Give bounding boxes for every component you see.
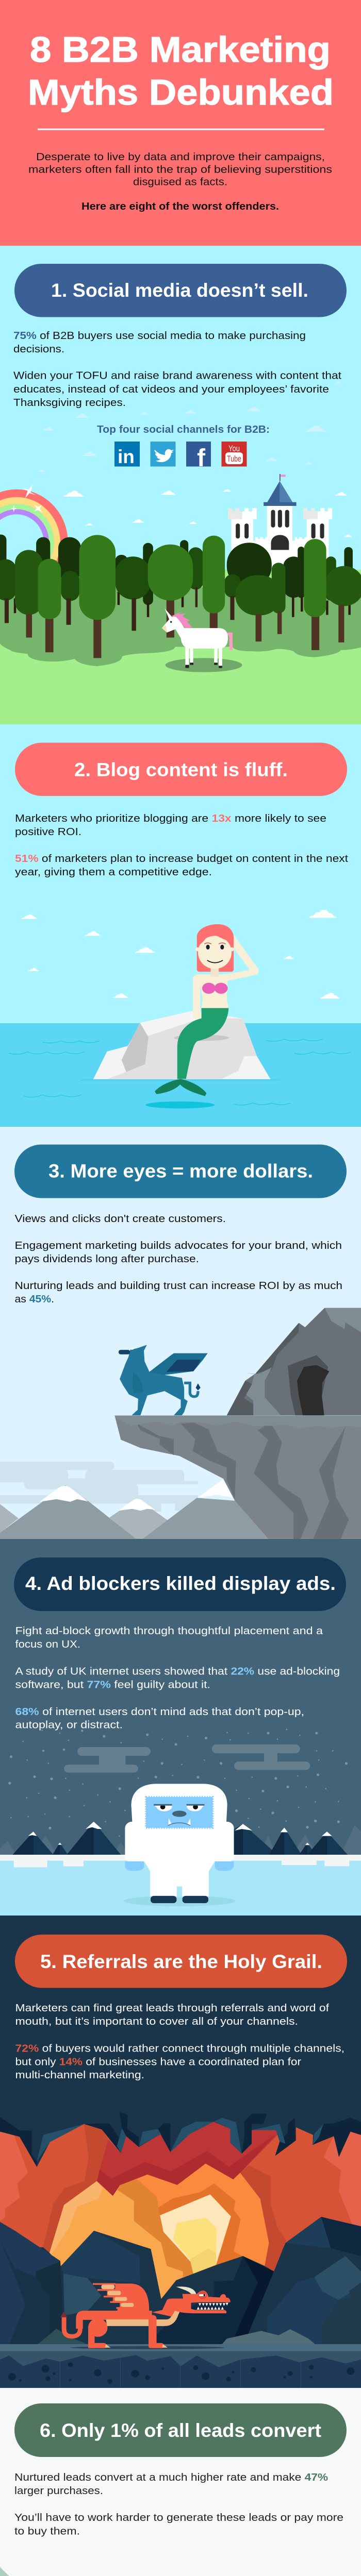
text block 3: Views and clicks don't create customers.: [14, 1213, 226, 1225]
heading pill 4: 4. Ad blockers killed display ads.: [25, 1573, 336, 1594]
ice shelf: [0, 1855, 361, 1867]
text block 4: software, but 77% feel guilty about it.: [15, 1680, 210, 1691]
cave lava walls: [0, 2122, 361, 2299]
icon: Twitter: [151, 442, 175, 467]
text block 2: positive ROI.: [15, 826, 81, 838]
intro text: [28, 151, 332, 212]
heading pill 2: [15, 743, 347, 796]
text block 6: Nurtured leads convert at a much higher rate and make 47%: [14, 2472, 328, 2483]
waves: [9, 1039, 351, 1105]
cliff and cave: [114, 1308, 361, 1539]
scene: yeti: [0, 1729, 361, 1906]
panel: myth 5: [0, 1916, 361, 2388]
panel: myth 6: [0, 2388, 361, 2576]
yeti: [124, 1784, 236, 1906]
icon: YouTube: You: [228, 444, 240, 453]
text block 6: You’ll have to work harder to generate these leads or pay more: [14, 2512, 343, 2523]
mountains: [0, 1822, 361, 1855]
rock: [81, 1011, 280, 1080]
text block 3: Nurturing leads and building trust can increase ROI by as much: [14, 1280, 342, 1292]
green mountains: [0, 2567, 235, 2576]
unicorn: [162, 608, 242, 672]
icon: LinkedIn: [114, 442, 140, 467]
text block 2: 51% of marketers plan to increase budget on content in the next: [15, 853, 348, 865]
heading pill 3: 3. More eyes = more dollars.: [48, 1160, 313, 1182]
text block 1: 75% of B2B buyers use social media to make purchasing: [13, 330, 306, 342]
trees: back row: [0, 535, 353, 617]
icon: YouTube: Tube: [227, 454, 241, 464]
title: 8 B2B Marketing: [30, 29, 331, 70]
rainbow: [0, 484, 68, 595]
text block 3: Engagement marketing builds advocates for your brand, which: [14, 1240, 342, 1251]
heading pill 2: 2. Blog content is fluff.: [74, 759, 288, 780]
text block 3: pays dividends long after purchase.: [14, 1253, 199, 1265]
text block 4: Fight ad-block growth through thoughtful placement and a: [15, 1625, 323, 1637]
text block 4: focus on UX.: [15, 1639, 80, 1650]
heading pill 5: 5. Referrals are the Holy Grail.: [40, 1951, 322, 1972]
text block 5: 72% of buyers would rather connect through multiple channels,: [15, 2043, 344, 2055]
scene: unicorn forest: [0, 381, 361, 724]
panel: myth 4: [0, 1539, 361, 1916]
ground: [0, 570, 361, 724]
text block 4: A study of UK internet users showed that 22% use ad-blocking: [15, 1666, 340, 1677]
text block 6: [14, 2472, 343, 2537]
clouds: [0, 1462, 198, 1512]
stars: [8, 1729, 348, 1837]
text block 1: Thanksgiving recipes.: [13, 397, 126, 409]
dragon: [60, 2283, 231, 2349]
title: [28, 29, 334, 112]
title: Myths Debunked: [28, 72, 334, 112]
panel: myth 1: [0, 246, 361, 725]
text block 5: multi-channel marketing.: [15, 2070, 144, 2081]
text block 5: but only 14% of businesses have a coordinated plan for: [15, 2057, 301, 2068]
icon: Facebook: f: [197, 445, 206, 472]
channel icons: Top four social channels for B2B:: [97, 424, 270, 435]
text block 4: 68% of internet users don’t mind ads that don’t pop-up,: [15, 1706, 304, 1718]
panel: myth 3: [0, 1127, 361, 1539]
stalactites: [0, 2112, 361, 2167]
icon: YouTube: [222, 442, 247, 467]
text block 6: to buy them.: [14, 2526, 80, 2537]
scene: griffin on cliff: [0, 1308, 361, 1539]
text block 4: autoplay, or distract.: [15, 1720, 123, 1731]
channel icons: [97, 424, 270, 472]
trees: front row: [38, 535, 326, 658]
text block 1: educates, instead of cat videos and your employees’ favorite: [13, 384, 329, 395]
text block 1: decisions.: [13, 344, 64, 355]
text block 5: [15, 2003, 344, 2081]
intro text: disguised as facts.: [133, 176, 227, 188]
scene: loch ness monster: [0, 2567, 361, 2576]
text block 3: [14, 1213, 342, 1305]
text block 3: as 45%.: [14, 1294, 54, 1305]
text block 6: larger purchases.: [14, 2485, 103, 2497]
text block 1: Widen your TOFU and raise brand awareness with content that: [13, 370, 342, 381]
heading pill 4: [14, 1557, 346, 1611]
griffin: [119, 1345, 208, 1415]
castle: [228, 474, 332, 570]
intro text: Here are eight of the worst offenders.: [81, 201, 279, 212]
panel: myth 2: [0, 724, 361, 1127]
heading pill 1: 1. Social media doesn’t sell.: [51, 280, 308, 301]
clouds: [22, 910, 340, 998]
mermaid: [155, 924, 259, 1096]
icon: LinkedIn: in: [118, 446, 135, 467]
text block 2: [15, 813, 348, 878]
text block 2: year, giving them a competitive edge.: [15, 867, 212, 878]
mountains: [0, 1479, 268, 1539]
icon: Facebook: [186, 442, 211, 472]
header panel: [0, 0, 361, 246]
heading pill 1: [14, 264, 347, 317]
scene: dragon cave: [0, 2112, 361, 2388]
heading pill 5: [15, 1935, 347, 1988]
text block 1: [13, 330, 342, 409]
clouds: [38, 381, 352, 537]
clouds: [64, 1744, 310, 1773]
text block 4: [15, 1625, 340, 1731]
intro text: marketers often fall into the trap of believing superstitions: [28, 164, 332, 175]
scene: mermaid on rock: [9, 910, 351, 1109]
trees: middle rows: [0, 547, 336, 631]
cave floor: [0, 2344, 361, 2388]
intro text: Desperate to live by data and improve their campaigns,: [36, 151, 325, 163]
cave rocks: [0, 2217, 361, 2344]
heading pill 6: [14, 2403, 347, 2457]
text block 5: Marketers can find great leads through referrals and word of: [15, 2003, 330, 2014]
text block 2: Marketers who prioritize blogging are 13x more likely to see: [15, 813, 326, 824]
heading pill 6: 6. Only 1% of all leads convert: [40, 2420, 321, 2441]
heading pill 3: [14, 1145, 347, 1198]
text block 5: mouth, but it’s important to cover all of your channels.: [15, 2016, 298, 2027]
